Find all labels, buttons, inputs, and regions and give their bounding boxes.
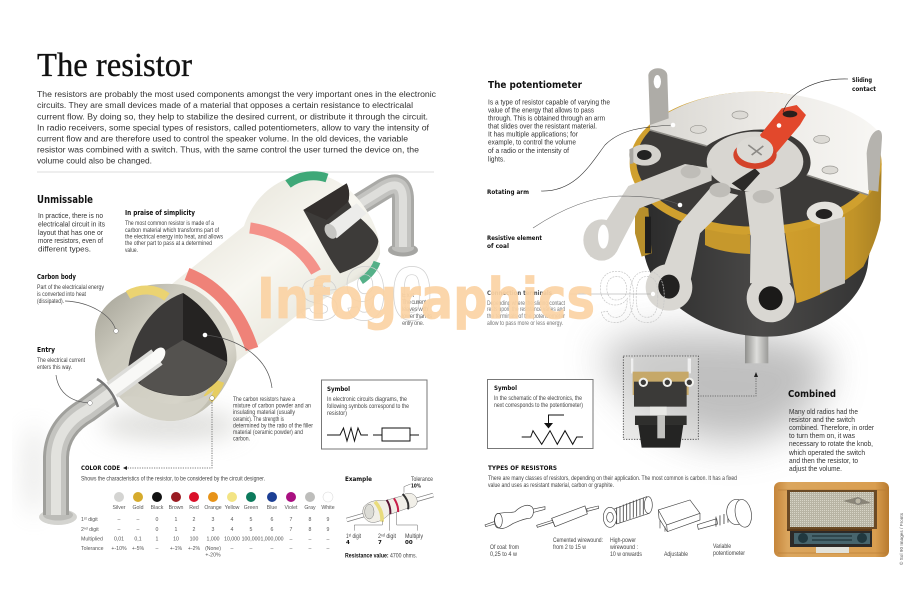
label: carbon body: (dissipated). bbox=[37, 299, 64, 305]
color code table: 0 bbox=[156, 527, 159, 533]
color code table: 5 bbox=[250, 527, 253, 533]
color code table: – bbox=[231, 546, 234, 552]
potentiometer text: through. This is obtained through an arm bbox=[488, 114, 605, 122]
color code table: +-5% bbox=[132, 546, 145, 552]
hidden text: exit: entry one. bbox=[402, 321, 424, 327]
right cut-out bbox=[303, 183, 378, 273]
color code table: Red bbox=[189, 505, 199, 511]
potentiometer illustration bbox=[583, 68, 882, 363]
body bbox=[95, 175, 380, 421]
text: in practice: more resistors, even of bbox=[38, 236, 104, 245]
text: in praise of simplicity: In praise of simplicity bbox=[125, 209, 195, 217]
color code table: 3 bbox=[212, 517, 215, 523]
combined text: adjust the volume. bbox=[789, 464, 842, 473]
color code table: 2 bbox=[193, 527, 196, 533]
color code table: – bbox=[309, 536, 312, 542]
color code table: +-1% bbox=[170, 546, 183, 552]
watermark: Infographics bbox=[257, 267, 595, 332]
color code table: +-2% bbox=[188, 546, 201, 552]
drawing: colour-banded resistor bbox=[347, 484, 433, 531]
heading: color code: COLOR CODE bbox=[81, 464, 120, 472]
left cap shade bbox=[95, 284, 236, 421]
hidden text: exit: leaves with bbox=[402, 307, 428, 313]
text: in praise of simplicity: the electrical energy into heat, and allows bbox=[125, 234, 223, 240]
label: sliding contact: Sliding bbox=[852, 76, 872, 84]
label: entry bbox=[37, 346, 85, 371]
color code table: – bbox=[118, 517, 121, 523]
type: cemented wirewound bbox=[537, 506, 603, 551]
example resistor: 7 bbox=[378, 540, 382, 546]
heading: combined: Combined bbox=[788, 389, 836, 400]
left ring bbox=[629, 144, 661, 166]
type: carbon: Of coal: from bbox=[490, 545, 519, 551]
color code table: 1 bbox=[175, 517, 178, 523]
type: carbon: 0,25 to 4 w bbox=[490, 552, 518, 558]
panel: symbol (resistor): following symbols correspond to the bbox=[327, 404, 410, 410]
color code table: 7 bbox=[290, 517, 293, 523]
text: in practice: layout that has one or bbox=[38, 228, 103, 237]
color code table: 10 bbox=[173, 536, 179, 542]
color code table: 3 bbox=[212, 527, 215, 533]
color code table: 8 bbox=[309, 527, 312, 533]
color code table: 6 bbox=[271, 527, 274, 533]
panel: symbol (potentiometer): Symbol bbox=[494, 384, 517, 392]
hidden text: connection terminals: Depending where the sliding contact bbox=[487, 301, 565, 307]
inset photo with dashed frame bbox=[623, 356, 698, 448]
label: resistive element: Resistive element bbox=[487, 234, 542, 242]
callout lines bbox=[56, 301, 272, 470]
combined text: which operated the switch bbox=[788, 448, 865, 457]
intro text: In radio receivers, some special types of resistors, called potentiometers, allow to vary the intensity of bbox=[37, 124, 430, 132]
color code table: 1,000 bbox=[207, 536, 220, 542]
right lead bbox=[350, 185, 418, 256]
type: high-power wirewound: wirewound : bbox=[609, 545, 638, 551]
label: entry: The electrical current bbox=[37, 358, 85, 364]
potentiometer text: of a radio or the intensity of bbox=[488, 146, 570, 155]
panel: symbol (potentiometer): next corresponds to the potentiometer) bbox=[494, 403, 583, 409]
gold casing bbox=[785, 163, 882, 303]
combined text: and then the resistor, to bbox=[789, 456, 858, 465]
type: adjustable bbox=[658, 500, 700, 558]
color code table: – bbox=[327, 536, 330, 542]
color code table: Gray bbox=[304, 505, 316, 511]
hidden text: connection terminals: Connection terminals bbox=[487, 290, 552, 297]
text: carbon resistors bbox=[233, 397, 313, 442]
example resistor: Multiply bbox=[405, 534, 423, 540]
dark body bbox=[643, 193, 880, 337]
label: entry: Entry bbox=[37, 346, 55, 354]
intro text: current flow and are therefore used to control the speaker volume. In the old devices, the variable bbox=[37, 134, 409, 144]
callout: connection terminals line bbox=[570, 292, 655, 296]
intro text: current flow. By doing so, they help to stabilize the desired current, or distribute it through the circuit. bbox=[37, 112, 428, 122]
color code table: – bbox=[156, 546, 159, 552]
watermark outline: s90 bbox=[298, 252, 433, 337]
potentiometer text: that slides over the resistant material. bbox=[488, 122, 597, 130]
hidden text: connection terminals: rests upon, the resistance varies and bbox=[487, 307, 565, 313]
text: carbon resistors: insulating material (usually bbox=[233, 410, 295, 416]
sliding contact bbox=[733, 105, 806, 169]
example resistor: Tolerance bbox=[411, 477, 434, 483]
colour bands bbox=[128, 176, 377, 399]
centre disc bbox=[707, 132, 803, 192]
hidden text: connection terminals: the terminals of the potentiometer bbox=[487, 314, 565, 320]
example resistor: 00 bbox=[405, 540, 413, 546]
top disc bbox=[630, 92, 882, 235]
text: in praise of simplicity: value. bbox=[125, 248, 138, 254]
type: variable potentiometer bbox=[697, 498, 754, 557]
photo credit: © Sol 90 Images / Fronts bbox=[898, 512, 904, 565]
color code table: (None) bbox=[205, 546, 221, 552]
color code table: Yellow bbox=[225, 505, 240, 511]
color code table: 6 bbox=[271, 517, 274, 523]
arm 3 bbox=[745, 188, 795, 322]
color code table: 7 bbox=[290, 527, 293, 533]
color code table: Green bbox=[244, 505, 258, 511]
hidden text: exit: The current bbox=[402, 300, 426, 306]
label: resistive element: of coal bbox=[487, 242, 509, 250]
color code table: 5 bbox=[250, 517, 253, 523]
text: carbon resistors: determined by the ratio of the filler bbox=[233, 424, 313, 430]
text: carbon resistors: mixture of carbon powder and an bbox=[233, 404, 311, 410]
combined text: Many old radios had the bbox=[789, 407, 858, 416]
color code table: 100,000 bbox=[242, 536, 260, 542]
color code table: 4 bbox=[231, 527, 234, 533]
text: carbon resistors: carbon. bbox=[233, 436, 250, 442]
color code table: – bbox=[271, 546, 274, 552]
hidden text: exit bbox=[402, 293, 432, 327]
type: adjustable: Adjustable bbox=[664, 552, 689, 558]
potentiometer shadow bbox=[600, 332, 827, 443]
color code table: 0,1 bbox=[134, 536, 142, 542]
radio photo bbox=[774, 482, 889, 557]
rivets bbox=[690, 111, 838, 174]
potentiometer text: value of the energy that allows to pass bbox=[488, 106, 594, 114]
panel: symbol (resistor) bbox=[322, 380, 427, 449]
type: carbon bbox=[485, 505, 545, 558]
color code table: Brown bbox=[169, 505, 183, 511]
combined text: to turn them on, it was bbox=[789, 431, 855, 440]
callout lines: potentiometer bbox=[533, 79, 848, 228]
color code table: 1 bbox=[156, 536, 159, 542]
color code table: 100 bbox=[190, 536, 198, 542]
panel: symbol (resistor): resistor) bbox=[327, 411, 347, 417]
dotted connector bbox=[698, 372, 758, 396]
combined text: resistor and the switch bbox=[789, 415, 855, 424]
potentiometer text: Is a type of resistor capable of varying the bbox=[488, 98, 610, 106]
text: in practice: In practice, there is no bbox=[38, 211, 103, 220]
color code table: – bbox=[290, 546, 293, 552]
color code table: 10,000 bbox=[224, 536, 240, 542]
combined text: combined. Therefore, in order bbox=[789, 423, 874, 432]
arm 1 bbox=[583, 164, 712, 261]
color code table: Blue bbox=[267, 505, 277, 511]
type: high-power wirewound: 10 w onwards bbox=[610, 552, 642, 558]
color code table: 2 bbox=[193, 517, 196, 523]
example resistor: 2ⁿᵈ digit bbox=[378, 533, 396, 540]
watermark outline: 90 bbox=[597, 258, 667, 338]
panel: symbol (potentiometer) bbox=[488, 380, 593, 448]
color code table: Violet bbox=[285, 505, 298, 511]
color code table: Orange bbox=[204, 505, 222, 511]
color code table: – bbox=[327, 546, 330, 552]
example resistor bbox=[345, 475, 434, 560]
color code table bbox=[81, 505, 335, 558]
potentiometer text: It has multiple applications; for bbox=[488, 130, 578, 138]
text: in practice bbox=[38, 211, 105, 254]
color code table: White bbox=[321, 505, 335, 511]
label: carbon body: is converted into heat bbox=[37, 292, 86, 298]
potentiometer text: lights. bbox=[488, 154, 505, 164]
color code table: 2ⁿᵈ digit bbox=[81, 527, 99, 533]
heading: unmissable: Unmissable bbox=[37, 193, 93, 206]
combined text: necessary to rotate the knob, bbox=[789, 439, 873, 448]
potentiometer text bbox=[488, 98, 610, 164]
example resistor: 1ˢᵗ digit bbox=[346, 533, 361, 540]
color code table: – bbox=[290, 536, 293, 542]
resistor illustration bbox=[39, 175, 418, 525]
contact plate bbox=[650, 92, 878, 195]
type: cemented wirewound: Cemented wirewound: bbox=[553, 538, 603, 544]
shaft bbox=[745, 327, 768, 363]
types description: value and uses as resistant material, carbon or graphite. bbox=[488, 483, 614, 489]
gold crescents bbox=[691, 97, 817, 106]
label: sliding contact bbox=[852, 76, 876, 93]
label: rotating arm: Rotating arm bbox=[487, 188, 529, 196]
hidden text: connection terminals: allow to pass more or less energy. bbox=[487, 321, 563, 327]
text: in praise of simplicity: The most common resistor is made of a bbox=[125, 221, 215, 227]
inner lip bbox=[122, 390, 214, 421]
color code table: +-10% bbox=[111, 546, 127, 552]
type: high-power wirewound: High-power bbox=[610, 538, 636, 544]
color code table: 0 bbox=[156, 517, 159, 523]
color code table: Black bbox=[151, 505, 164, 511]
hidden text: exit: Exit bbox=[402, 293, 414, 299]
label: carbon body bbox=[37, 273, 104, 305]
color code table: – bbox=[118, 527, 121, 533]
type: variable potentiometer: potentiometer bbox=[713, 551, 745, 557]
text: in practice: electricalal circuit in its bbox=[38, 220, 105, 228]
text: carbon resistors: material (ceramic powder) and bbox=[233, 430, 303, 436]
color code table: 8 bbox=[309, 517, 312, 523]
arm 2 bbox=[646, 183, 738, 311]
color code table: Tolerance bbox=[81, 546, 104, 552]
example resistor: Resistance value: 4700 ohms. bbox=[345, 554, 417, 560]
label: sliding contact: contact bbox=[852, 85, 876, 93]
example resistor: 4 bbox=[346, 540, 350, 546]
label: entry: enters this way. bbox=[37, 365, 72, 371]
types description bbox=[488, 476, 737, 489]
panel: symbol (potentiometer): In the schematic of the electronics, the bbox=[494, 396, 583, 402]
color code table: 1,000,000 bbox=[260, 536, 284, 542]
example resistor: 10% bbox=[411, 484, 421, 490]
example resistor: Example bbox=[345, 475, 373, 483]
color code table: Gold bbox=[133, 505, 144, 511]
text: carbon resistors: The carbon resistors have a bbox=[233, 397, 296, 403]
intro text: The resistors are probably the most used components amongst the very important ones in the electronic bbox=[37, 90, 436, 99]
terminal posts bbox=[648, 68, 669, 125]
color code table: – bbox=[137, 517, 140, 523]
color code table: 0,01 bbox=[114, 536, 124, 542]
color code table: – bbox=[250, 546, 253, 552]
resistor shadows bbox=[24, 409, 240, 515]
text: in praise of simplicity bbox=[125, 209, 223, 254]
color code table: 9 bbox=[327, 527, 330, 533]
label: resistive element bbox=[487, 234, 542, 250]
potentiometer text: example, to control the volume bbox=[488, 138, 576, 146]
types description: There are many classes of resistors, depending on their application. The most common is carbon. It has a fixed bbox=[488, 476, 737, 482]
color code table: Silver bbox=[113, 505, 126, 511]
color code table: 4 bbox=[231, 517, 234, 523]
intro text: resistor was combined with a switch. Thus, with the same control the user turned the device on, the bbox=[37, 146, 420, 154]
color code table: – bbox=[137, 527, 140, 533]
hidden text: connection terminals bbox=[487, 290, 565, 327]
intro text: circuits. They are small devices made of a material that opposes a certain resistance to electricalal bbox=[37, 101, 413, 110]
left lead bbox=[39, 345, 168, 525]
heading: types of resistors: TYPES OF RESISTORS bbox=[488, 464, 557, 472]
left cut-out bbox=[128, 293, 227, 396]
intro text: volume could also be changed. bbox=[37, 156, 152, 166]
label: carbon body: Part of the electricalal energy bbox=[37, 285, 104, 291]
watermark outline bbox=[298, 252, 667, 338]
color code table: Multiplied bbox=[81, 536, 103, 542]
text: in praise of simplicity: the other part to pass at a determined bbox=[125, 241, 212, 247]
intro text bbox=[37, 90, 436, 166]
type: variable potentiometer: Variable bbox=[713, 544, 732, 550]
combined text bbox=[788, 407, 874, 473]
panel: symbol (resistor): In electronic circuits diagrams, the bbox=[327, 397, 408, 403]
hidden text: exit: lower than its bbox=[402, 314, 432, 320]
color code table: – bbox=[309, 546, 312, 552]
text: in practice: different types. bbox=[38, 244, 91, 254]
label: carbon body: Carbon body bbox=[37, 273, 76, 281]
color code description: Shows the characteristics of the resistor, to be considered by the circuit designer. bbox=[81, 476, 265, 482]
color code table: 9 bbox=[327, 517, 330, 523]
right terminal bbox=[807, 202, 845, 293]
type: high-power wirewound bbox=[603, 497, 652, 558]
color code swatches bbox=[114, 492, 333, 502]
text: carbon resistors: ceramic). The strength is bbox=[233, 417, 284, 423]
color code table: 1 bbox=[175, 527, 178, 533]
color code table: 1ˢᵗ digit bbox=[81, 517, 98, 523]
text: in praise of simplicity: carbon material which transforms part of bbox=[125, 228, 219, 234]
type: cemented wirewound: from 2 to 15 w bbox=[553, 545, 587, 551]
heading: the potentiometer: The potentiometer bbox=[488, 80, 582, 91]
color code table: +-20% bbox=[205, 552, 221, 558]
panel: symbol (resistor): Symbol bbox=[327, 385, 350, 393]
title: The resistor bbox=[37, 47, 193, 84]
